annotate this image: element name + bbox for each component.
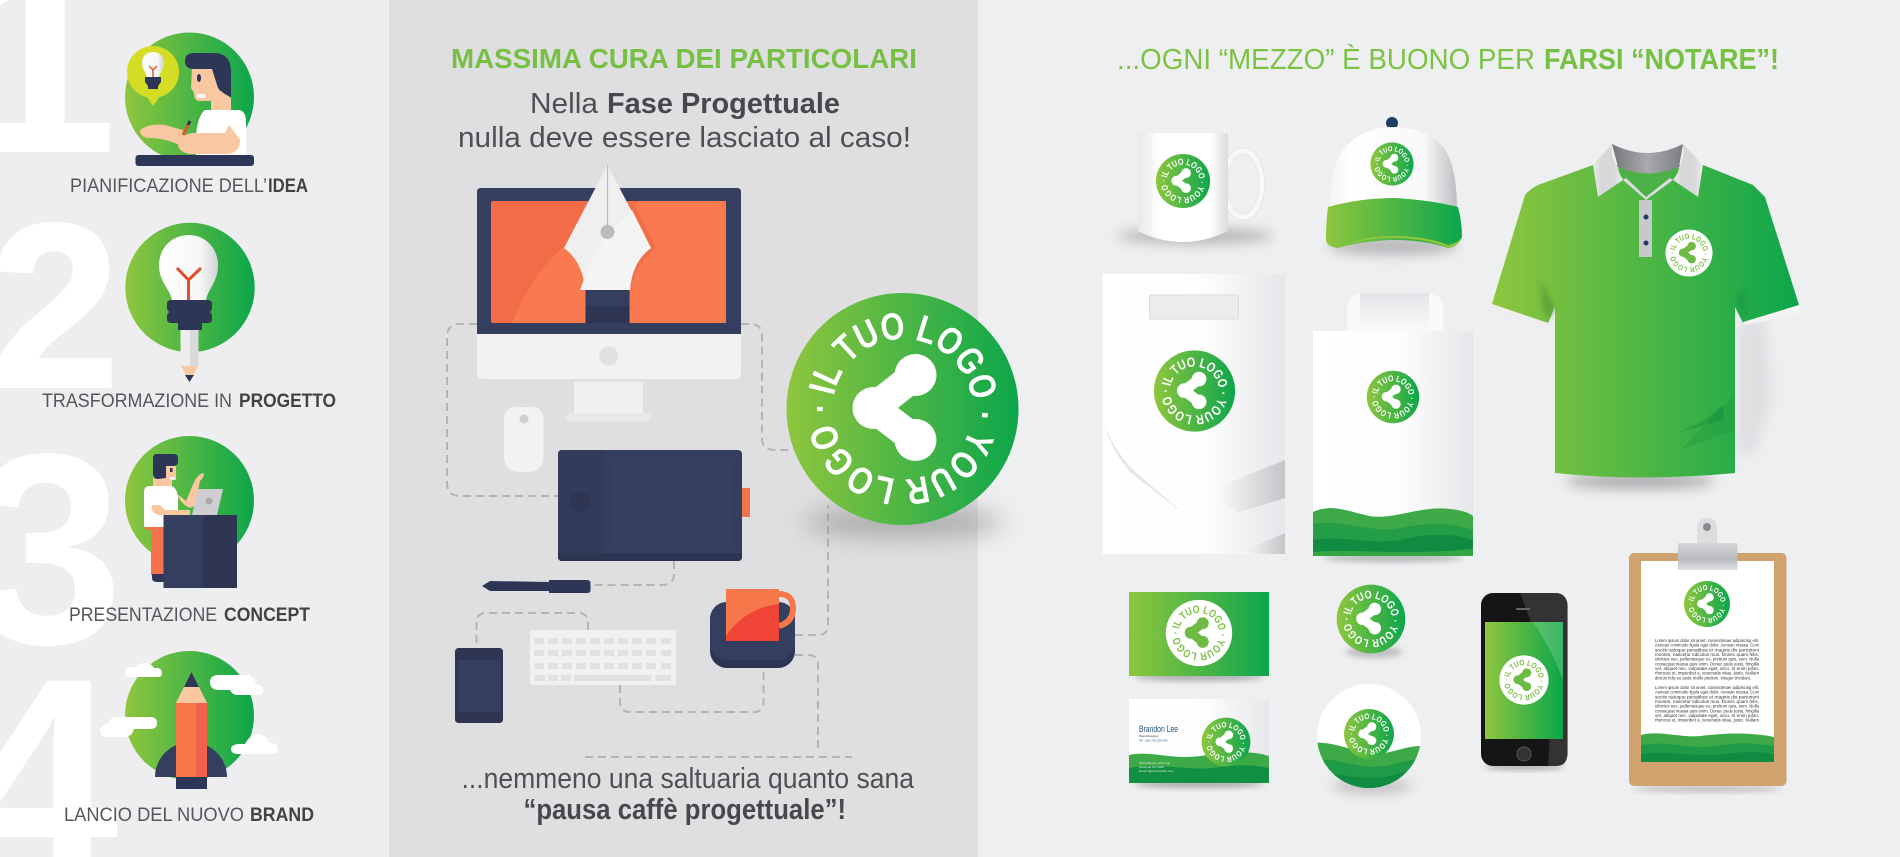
mockup: folder with envelope: IL TUO LOGO · YOUR LOGO · xyxy=(1162,358,1228,424)
text: coffee break: “pausa caffè progettuale”! xyxy=(524,794,846,826)
caption: step 3: PRESENTAZIONE xyxy=(69,605,217,626)
mockup: white business card: Tel: +90 (70) 234 000 xyxy=(1139,738,1168,742)
panel: process steps background xyxy=(0,0,389,857)
heading: every medium: ...OGNI “MEZZO” È BUONO PER xyxy=(1117,43,1535,76)
mockup: clipboard: IL TUO LOGO · YOUR LOGO · xyxy=(1688,585,1726,623)
mockup: clipboard: dictum felis eu pede mollis pretium. Integer tincidunt. xyxy=(1655,675,1751,680)
mockup: cap xyxy=(1326,117,1462,261)
mockup: clipboard: ultricies nec, pellentesque eu, pretium quis, sem. Nulla xyxy=(1655,704,1759,709)
mockup: clipboard: sociis natoque penatibus et magnis dis parturient xyxy=(1655,694,1760,699)
caption: step 3 xyxy=(69,605,310,626)
icon: mouse xyxy=(504,407,544,472)
mockup: green business card: IL TUO LOGO · YOUR LOGO · xyxy=(1172,606,1226,660)
mockup: clipboard: vel, aliquet nec, vulputate eget, arcu. In enim justo, xyxy=(1655,666,1759,671)
mockup: white business card: IL TUO LOGO · YOUR LOGO · xyxy=(1206,722,1246,762)
mockup: clipboard: sociis natoque penatibus et magnis dis parturient xyxy=(1655,647,1760,652)
mockup: shopping bag xyxy=(1313,293,1473,565)
large logo badge: IL TUO LOGO · YOUR LOGO · xyxy=(808,313,996,504)
text: coffee break xyxy=(462,763,914,826)
mockup: shopping bag: IL TUO LOGO · YOUR LOGO · xyxy=(1372,375,1414,418)
caption: step 3: CONCEPT xyxy=(224,605,310,626)
icon: coffee mug on coaster xyxy=(710,589,795,668)
caption: step 1: PIANIFICAZIONE DELL’ xyxy=(70,176,267,197)
mockup: clipboard: rhoncus ut, imperdiet a, venenatis vitae, justo. Nullam xyxy=(1655,671,1759,676)
mockup: round badge xyxy=(1336,584,1406,660)
mockup: white business card xyxy=(1129,699,1269,792)
mockup: folder with envelope xyxy=(1102,274,1285,554)
subheading: fase progettuale xyxy=(458,88,911,154)
dashed connectors xyxy=(447,324,852,757)
mockup: white and green button: IL TUO LOGO · YOUR LOGO · xyxy=(1348,713,1389,754)
mockup: white business card: Brand Designer xyxy=(1139,734,1159,738)
mockup: clipboard: montes, nascetur ridiculus mus. Donec quam felis, xyxy=(1655,699,1759,704)
heading: every medium: FARSI “NOTARE”! xyxy=(1544,44,1779,76)
caption: step 4: LANCIO DEL NUOVO xyxy=(64,805,244,826)
mockup: smartphone xyxy=(1481,593,1568,773)
mockup: clipboard: Aenean commodo ligula eget dolor. Aenean massa. Cum xyxy=(1655,690,1759,695)
mockup: white business card: Mail address, 123 Loop xyxy=(1139,761,1171,765)
icon: keyboard xyxy=(530,630,676,685)
shadow: large logo xyxy=(803,506,1003,538)
mockup: mug: IL TUO LOGO · YOUR LOGO · xyxy=(1161,158,1205,204)
mockup: white and green button xyxy=(1317,684,1421,798)
mockup: clipboard: vel, aliquet nec, vulputate eget, arcu. In enim justo, xyxy=(1655,713,1759,718)
icon: pencil rocket launch xyxy=(100,651,278,789)
panel: design phase background xyxy=(389,0,978,857)
mockup: polo shirt xyxy=(1492,144,1799,496)
text: coffee break: ...nemmeno una saltuaria quanto sana xyxy=(462,763,914,795)
mockup: cap: IL TUO LOGO · YOUR LOGO · xyxy=(1374,146,1410,182)
mockup: white business card: postcode NO 0000 xyxy=(1139,765,1164,769)
mockup: clipboard: Lorem ipsum dolor sit amet, consectetuer adipiscing elit. xyxy=(1655,685,1759,690)
icon: pen nib xyxy=(564,165,656,323)
icon: stylus xyxy=(482,580,590,593)
caption: step 2 xyxy=(42,391,336,412)
mockup: clipboard: Aenean commodo ligula eget dolor. Aenean massa. Cum xyxy=(1655,643,1759,648)
caption: step 2: PROGETTO xyxy=(239,391,336,412)
mockup: smartphone: IL TUO LOGO · YOUR LOGO · xyxy=(1504,660,1544,700)
heading: massima cura: MASSIMA CURA DEI PARTICOLARI xyxy=(451,43,917,74)
mockup: polo shirt: IL TUO LOGO · YOUR LOGO · xyxy=(1670,234,1708,272)
caption: step 2: TRASFORMAZIONE IN xyxy=(42,391,232,412)
mockup: clipboard: Lorem ipsum dolor sit amet, consectetuer adipiscing elit. xyxy=(1655,638,1759,643)
icon: smartphone xyxy=(455,648,503,723)
subheading: fase progettuale: Nella xyxy=(530,88,598,120)
mockup: white business card: Email: @yourdomain.com xyxy=(1139,769,1174,773)
mockup: clipboard: montes, nascetur ridiculus mus. Donec quam felis, xyxy=(1655,652,1759,657)
icon: concept presentation xyxy=(125,436,254,588)
mockup: clipboard xyxy=(1629,518,1786,795)
panel: merchandise background xyxy=(978,0,1900,857)
icon: desktop monitor xyxy=(477,188,741,421)
mockup: white business card: Brandon Lee xyxy=(1139,724,1178,734)
subheading: fase progettuale: Fase Progettuale xyxy=(607,88,840,120)
mockup: clipboard: ultricies nec, pellentesque eu, pretium quis, sem. Nulla xyxy=(1655,657,1759,662)
mockup: clipboard: rhoncus ut, imperdiet a, venenatis vitae, justo. Nullam xyxy=(1655,718,1759,723)
caption: step 4: BRAND xyxy=(250,805,314,826)
subheading: fase progettuale: nulla deve essere lasciato al caso! xyxy=(458,122,911,154)
mockup: round badge: IL TUO LOGO · YOUR LOGO · xyxy=(1343,590,1399,648)
icon: planning the idea xyxy=(125,32,254,166)
heading: every medium xyxy=(1117,43,1779,76)
icon: bulb pencil project xyxy=(125,223,255,382)
mockup: clipboard: consequat massa quis enim. Donec pede justo, fringilla xyxy=(1655,661,1759,666)
icon: graphic tablet xyxy=(558,450,750,561)
mockup: mug xyxy=(1117,133,1274,250)
mockup: green business card xyxy=(1129,592,1269,684)
mockup: clipboard: consequat massa quis enim. Donec pede justo, fringilla xyxy=(1655,708,1759,713)
caption: step 1: IDEA xyxy=(268,176,308,197)
